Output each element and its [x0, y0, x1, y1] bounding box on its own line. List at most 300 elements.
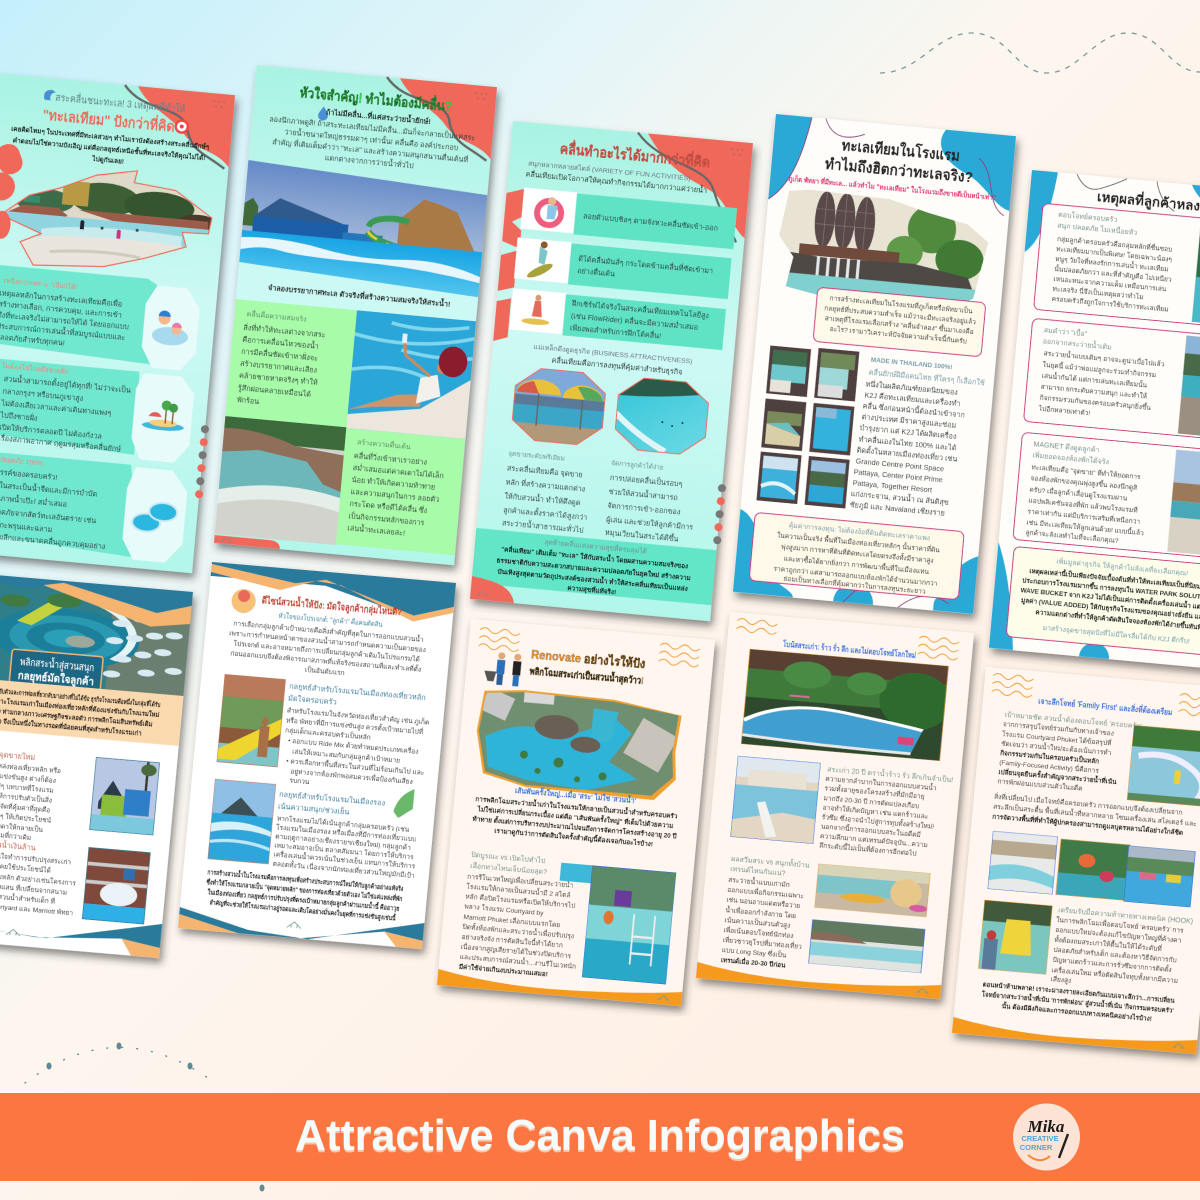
icon: menu dots [475, 92, 487, 100]
column text: easy management: ผู้เล่น และช่วยให้ลูกค้ามีการ [606, 515, 694, 532]
text: secondary city hotels [272, 790, 422, 880]
closing text: ในเมืองท่องเที่ยว กลยุทธ์การปรับปรุงที่ตรงเป้าหมายกลุ่มลูกค้าผ่านเกมน้ำนี้ คืออาวุธ [207, 886, 400, 914]
green panel: excitement: คลื่นที่วิ่งเข้าหาเราอย่าง [354, 451, 427, 467]
section 2 [0, 358, 196, 464]
title: คลื่นทำอะไรได้มากกว่าที่คิด [559, 139, 711, 170]
logo: CREATIVE [1021, 1134, 1059, 1143]
bottom panel: ธรรมชาติกับความสะดวกสบายและความปลอดภัยในยุคใหม่ สร้างความ [496, 555, 691, 582]
green panel: realism [225, 299, 357, 427]
box: magnet: เพิ่มยอดจองห้องพักได้จริง [1032, 450, 1109, 466]
green panel: excitement: เล่นน้ำทะเลเลยล่ะ! [347, 522, 405, 537]
text: adult pool vs family: เน้นความเป็นส่วนตัวสูง [724, 915, 791, 930]
text: adult pool vs family: เที่ยวชาวยุโรปที่มาท่องเที่ยว [722, 935, 803, 951]
bottom panel [471, 528, 716, 605]
logo mark [916, 988, 929, 994]
text: city hotels: กลุ่มเด็กและครอบครัวเป็นหลัก [285, 726, 371, 742]
photo: family slide [216, 674, 286, 768]
intro text: (Family-Focused Activity) นี่คือการ [999, 757, 1100, 775]
text: city hotels: • ควรเลือกหาพื้นที่สระในส่วนที่ไม่ร้อนเกินไป และ [286, 756, 425, 777]
subheading business: คลื่นเทียมคือการลงทุนที่คุ้มค่าสำหรับธุรกิจ [551, 356, 683, 377]
text: 20-year pool problems: ความลึกมาก แต่เทรนด์ปัจจุบัน...ความ [820, 832, 928, 849]
text: 20-year pool problems: นอกจากนี้การออกแบบสระในอดีตมี [821, 821, 921, 839]
callout: intro: อะไร? เรามาวิเคราะห์ปัจจัยความสำเร็จนี้กันครับ [829, 324, 967, 345]
box: magnet: ครับ? เมื่อลูกค้าเลื่อนดูโรงแรมผ่าน [1029, 484, 1128, 502]
box: family: ครอบครัวถึงถูกใจการใช้บริการทะเลเทียม [1051, 295, 1169, 314]
bottom panel: สุดท้ายคลื่นแห่งความสุขที่ครบคุมได้ [544, 537, 647, 556]
photo: beach guests [1167, 450, 1200, 554]
callout: intro [813, 287, 986, 357]
icon: menu dots [213, 100, 225, 108]
section 2: ไม่ต้องเสียเวลาและค่าเดินทางแพงๆ [0, 398, 112, 417]
intro text: ชัดเจนว่า สวนน้ำใหม่จะต้องเน้นการทำ [1001, 738, 1112, 757]
decor zigzag left [992, 673, 1033, 698]
panel: page 7 water park design [178, 562, 456, 949]
closing text [204, 866, 404, 924]
column text: easy management: จัดการการเข้า-ออกของ [607, 501, 681, 517]
panel: page 6 turning pools into attractions [0, 571, 193, 958]
decor cyan blobs [731, 114, 1016, 634]
box: boredom: ในยุคนี้ แม้ว่าพ่อแม่ลูกจะร่วมทำกิจกรรม [1042, 360, 1157, 379]
box: family: ตอบโจทย์ครอบครัว [1058, 210, 1118, 224]
box: boredom: ออกจากสระว่ายน้ำเดิม [1042, 334, 1112, 352]
panel: page 3 what waves can do [470, 121, 757, 622]
column text: easy management: หมุนเวียนในสระได้ดีขึ้น [605, 527, 679, 544]
intro text: โปรเจกต์ และอาจหมายถึงการเปลี่ยนกลุ่มลูกค้าเดิมในโปรแกรมได้ [233, 639, 420, 663]
box: boredom: เล่นน้ำกันได้ แต่การเล่นทะเลเทียมนั้น [1041, 371, 1148, 389]
decor blobs [0, 139, 28, 241]
text: made in Thailand: Grande Centre Point Space [855, 456, 944, 473]
logo mark [1172, 1043, 1185, 1049]
row: float: ลอยตัวแบบชิลๆ ตามจังหวะคลื่นซัดเข้า-ออก [583, 211, 718, 233]
logo: CORNER [1020, 1143, 1053, 1152]
box: magnet: เช่น มีทะเลเทียมให้ลูกเล่นด้วย! แบบนี้แล้ว [1026, 517, 1144, 537]
row: surf: เพียงพอสำหรับการฝึกโต้คลื่น! [570, 323, 661, 340]
decor zigzag right [1178, 693, 1200, 718]
intro text: การเลือกกลุ่มลูกค้าเป้าหมายคือสิ่งสำคัญที่สุดในการออกแบบสวนน้ำ [233, 618, 424, 644]
body text: สิ่งที่เปลี่ยนไป เมื่อโจทย์คือครอบครัว การออกแบบจึงต้องเปลี่ยนจาก [994, 792, 1183, 817]
text: 20-year pool problems [819, 762, 954, 860]
box: family: นั้นปลอดภัยกว่า และที่สำคัญคือ ไม่เหนียว [1054, 264, 1172, 284]
photo: diving board pool [730, 756, 821, 844]
column text: easy management: จัดการลูกค้าได้ง่าย [611, 459, 664, 472]
subheading: ภูเก็ต พัทยา ที่มีทะเล... แล้วทำไม "ทะเลเทียม" ในโรงแรมถึงขายดีเป็นหน้าเท่า? [788, 173, 997, 203]
text: secondary city hotels: ตามฤดูกาลอย่างเชียงรายฯ/เชียงใหม่) กลุ่มลูกค้า [275, 833, 411, 852]
text: technical challenges: ทั้งต้องถมสระเก่าให้ตื้นในให้ได้ระดับที่ [1054, 935, 1162, 953]
decor dots [713, 484, 726, 545]
text: closed vs open: การรีโนเวทใหญ่เพื่อเปลี่ยนสระว่ายน้ำ [467, 872, 574, 890]
section 1 [0, 265, 202, 372]
text: made in Thailand: ติดตั้งในหลายเมืองท่องเที่ยว เช่น [856, 444, 958, 463]
text: technical challenges: เครื่องเล่นใหม่ หรือตัดสินใจทุบทั้งหากมีความ [1051, 965, 1178, 985]
box: family: กลุ่มลูกค้าครอบครัวคือกลุ่มหลักที่ชื่นชอบ [1057, 234, 1173, 254]
photo: aerial lagoon [476, 690, 682, 800]
text: city hotels: อยู่ห่างจากห้องพักพอสมควรเพื่อป้องกันเสียง [290, 766, 413, 786]
box: magnet: ทะเลเทียมคือ "จุดขาย" ที่ทำให้ยอดการ [1031, 462, 1141, 482]
text: closed vs open: และประสบการณ์สวนน้ำ...งานรีโนเวทนัก [459, 952, 576, 971]
section 2: เปิดให้บริการตลอดปี ไม่ต้องกังวล [0, 422, 102, 441]
column text: premium destination: สระคลื่นเทียมคือ จุดขาย [507, 463, 583, 479]
bottom orange wave [952, 1017, 1197, 1054]
photo row [987, 831, 1196, 907]
title [41, 89, 190, 137]
box: magnet: แอปพลิเคชันจองที่พัก แล้วพบโรงแรมที่ [1028, 495, 1138, 514]
box: boredom: สามารถ ยกระดับความสนุก และทำให้ [1040, 383, 1147, 400]
green panel: excitement: และความสนุกในการ ลอยตัว [350, 487, 440, 504]
text: adult pool vs family: ออกแบบเพื่อกิจกรรมเฉพาะ [727, 885, 804, 901]
photo: secondary city pool [208, 778, 276, 864]
text: closed vs open: Marriott Phuket เลือกแบบแรกโดย [463, 913, 561, 929]
section 1: เหนือกว่าเพราะ "เลือกได้" [3, 277, 79, 291]
section 2: กลางกรุงฯ หรือบนภูเขาสูง [2, 386, 84, 403]
logo [1013, 1104, 1080, 1170]
callout: intro: การสร้างทะเลเทียมในโรงแรมที่ภูเก็ตหรือพัทยาเป็น [829, 293, 973, 316]
intro text: เปลี่ยนจุดยืนครั้งสำคัญจากสระว่ายน้ำที่เน้น [998, 766, 1118, 786]
closing text [980, 978, 1176, 1025]
text: adult pool vs family: สระว่ายน้ำแบบเก่ามัก [728, 875, 790, 889]
photo: rocks and sand [214, 416, 346, 546]
text: secondary city hotels: โรงแรมในเมืองรอง หรือเมืองที่มีการท่องเที่ยวแบบ [276, 823, 417, 844]
text: technical challenges: ออกแบบใหม่จะต้องแก้ไขปัญหาใหญ่ที่ค้างคา [1055, 925, 1182, 945]
box: boredom: ไปอีกหลายเท่าตัว! [1037, 405, 1091, 417]
closing text: ตอนหน้าห้ามพลาด! เราจะมาลงรายละเอียดกันแบบเจาะลึกว่า...การเปลี่ยน [982, 978, 1176, 1005]
decorative dotted arc bottom left [25, 1042, 264, 1192]
callout: worth investing: คุ้มค่าการลงทุน: ไม่ต้องง้อที่ดินติดทะเลราคาแพง [788, 521, 930, 543]
text: city hotels: กลยุทธ์สำหรับโรงแรมในเมืองท่องเที่ยวหลัก [289, 681, 426, 702]
photo: waterfall ship [779, 190, 988, 301]
text: city hotels: มัดใจครอบครัว [288, 694, 337, 707]
title [824, 134, 976, 187]
decor zigzag left [736, 618, 777, 635]
text: city hotels: หรือ พัทยาที่มีการแข่งขันสูง ควรตั้งเป้าหมายไปที่ [286, 716, 424, 736]
intro text: จากการสรุปโจทย์ร่วมกันกับทางเจ้าของ [1002, 720, 1114, 738]
text: city hotels: เล่นให้เหมาะสมกับกลุ่มลูกค้าเป้าหมาย [292, 747, 401, 765]
banner [0, 1093, 1200, 1181]
photo: water slides [89, 756, 160, 836]
text: adult pool vs family: แบบ Long Stay ซึ่งเป็น [721, 945, 787, 960]
banner title: Attractive Canva Infographics [295, 1111, 905, 1160]
intro text [997, 708, 1142, 797]
text: city hotels: รบกวน [289, 777, 310, 786]
photo: water play [582, 865, 676, 984]
text: made in Thailand: หนึ่งในผลิตภัณฑ์ยอดนิยมของ [865, 379, 958, 397]
text: technical challenges: เสี่ยงสูง [1050, 974, 1072, 985]
text: adult pool vs family: น้ำเพื่อออกกำลังกาย โดย [725, 905, 797, 920]
title plaque: กลยุทธ์มัดใจลูกค้า [17, 668, 95, 689]
panel: page 2 why waves matter [214, 65, 497, 565]
title: ดีไซน์สวนน้ำให้ปัง: มัดใจลูกค้ากลุ่มไหนดี? [261, 593, 403, 620]
panel: page 4 hotel wave pool [731, 114, 1016, 634]
text: made in Thailand: K2J คือทะเลเทียมและเครื่องทำ [864, 390, 961, 408]
green panel: excitement [336, 428, 465, 555]
icon: island [130, 373, 195, 464]
text: made in Thailand: คลื่นยักษ์ฝีมือคนไทย ที่ใครๆ ก็เลือกใช้ [868, 367, 985, 387]
intro text: เรามาดูกันว่าการตัดสินใจครั้งสำคัญนี้ต้องเจอกับอะไรบ้าง! [494, 825, 654, 849]
green panel: excitement: เป็นกิจกรรมหลักของการ [348, 510, 425, 527]
box: boredom: สมคำว่า "เบื่อ" [1043, 325, 1088, 338]
icon: pool [121, 467, 189, 564]
body text: สระลึกเป็นสระตื้น พื้นที่เล่นน้ำที่หลากหลาย โซนเครื่องเล่น สไลเดอร์ และ [993, 802, 1197, 828]
text: technical challenges: ในการพลิกโฉมเพื่อตอบโจทย์ 'ครอบครัว' การ [1056, 915, 1184, 935]
intro text [266, 101, 477, 176]
bottom orange wave [696, 962, 941, 999]
callout: worth investing: และหาซื้อได้ยากยิ่งกว่า การพัฒนาพื้นที่ในเมืองแทน [783, 553, 930, 576]
column text: easy management [605, 459, 699, 545]
intro text: ลองนึกภาพดูสิ! ถ้าสระทะเลเทียมไม่มีคลื่น...มันก็จะกลายเป็นแค่สระ [269, 114, 476, 143]
text: 20-year pool problems: อาจทำให้เกิดปัญหา เช่น แตกร้าวและ [822, 803, 929, 821]
panel: page 10 family first [952, 667, 1200, 1054]
icon: green slide [393, 787, 415, 819]
title: โบนัสสระเก่า: ร้าว รั่ว ลึก และไม่ตอบโจทย์โลกใหม่ [782, 638, 917, 660]
subtitle: พลิกโฉมสระเก่าเป็นสวนน้ำสุดว้าว! [528, 664, 644, 687]
section 1: เหตุผลหลักในการสร้างทะเลเทียมคือเพื่อ [0, 288, 123, 309]
green panel: realism: การมีคลื่นซัดเข้าหาฝั่งจะ [241, 347, 318, 363]
bottom panel: บันเทิงสูงสุดตามวัตถุประสงค์ของสวนน้ำ ทำให้สระคลื่นเทียมเป็นแหล่ง [497, 565, 688, 594]
intro text: แตกต่างจากการว่ายน้ำทั่วไป [324, 152, 415, 170]
logo mark [220, 537, 233, 543]
title plaque [9, 649, 103, 693]
column text: premium destination [502, 449, 593, 535]
decor zigzag right [917, 636, 959, 660]
text: adult pool vs family [720, 852, 810, 971]
icon: pool swatch [560, 863, 595, 884]
decorative dashed wave top right [880, 33, 1200, 73]
photo: woman by pool [346, 310, 476, 440]
intro text: การพักผ่อนแบบส่วนตัวในอดีต [997, 777, 1083, 793]
photo: aerial water park [0, 582, 192, 696]
decor outlines [733, 114, 1011, 614]
closing text: สำคัญที่จะช่วยให้โรงแรมเก่าอยู่รอดและเติบโตอย่างมั่นคงในยุคที่การแข่งขันสูงเช่นนี้ [209, 897, 397, 924]
box: boredom: สระว่ายน้ำแบบเดิมๆ อาจจะดูน่าเบื่อไปแล้ว [1043, 349, 1165, 369]
section 2: ไปถึงชายฝั่ง [0, 410, 38, 423]
body text [992, 792, 1198, 839]
intro text: เป็นอันดับแรก [305, 665, 345, 677]
panel: page 5 why customers love [988, 170, 1200, 685]
intro text [226, 618, 427, 684]
row: jump [514, 237, 732, 299]
text: made in Thailand: ทำคลื่นเองในไทย 100% และได้ [858, 434, 957, 452]
corner blob [394, 78, 497, 159]
logo: Mika [1027, 1117, 1065, 1136]
section 1: สร้างทางเลือก, การควบคุม, และการเข้า [0, 299, 122, 320]
text: secondary city hotels: เน้นความสนุก/ช่วงเย็น [278, 801, 350, 817]
text: closed vs open: เลือกทางไหนเจ็บน้อยสุด? [470, 861, 547, 876]
subheading business [532, 342, 693, 377]
intro text: เป้าหมายชัด สวนน้ำต้องตอบโจทย์ 'ครอบครัว' [1004, 708, 1142, 731]
logo mark [657, 995, 670, 1001]
top chevrons [0, 571, 193, 622]
photo grid [756, 343, 859, 509]
closing text: การสร้างสวนน้ำในโรงแรมคือการลงทุนเพื่อสร้างประสบการณ์ใหม่ให้กับลูกค้าอย่างแท้จริง [207, 866, 404, 894]
text: closed vs open: ปิดทั้งห้องพักและสระว่ายน้ำเพื่อปรับปรุง [462, 922, 575, 940]
intro text: สำคัญ ที่เติมเต็มคำว่า "ทะเล" และสร้างความสนุกสนานตื่นเต้นที่ [272, 136, 469, 164]
text: adult pool vs family: เพื่อเน้นตอบโจทย์นักท่อง [723, 925, 794, 940]
callout: worth investing [749, 512, 964, 600]
row: surf: ฝึกเซิร์ฟได้จริงในสระคลื่นเทียมเทคโนโลยีสูง [571, 299, 709, 321]
panel: page 9 old pool problems [696, 612, 974, 999]
text: city hotels: สำหรับโรงแรมในจังหวัดท่องเที่ยวสำคัญ เช่น ภูเก็ต [287, 706, 430, 727]
column text: premium destination: จุดขายระดับพรีเมียม [508, 449, 565, 463]
text: closed vs open: มีค่าใช้จ่ายเกินงบประมาณเสมอ! [458, 962, 548, 978]
decor dots [195, 425, 209, 499]
green panel: excitement: กระโดด หรือดีได้คลื่น ซึ่ง [349, 499, 428, 515]
box: family [1034, 203, 1200, 330]
caption: จำลองบรรยากาศทะเล ตัวจริงที่สร้างความสมจริงให้สระน้ำ! [268, 281, 451, 309]
text: made in Thailand: Pattaya, Together Resort [852, 478, 933, 494]
green panel: realism: สร้างบรรยากาศและเสียง [240, 359, 317, 375]
text: closed vs open: โรงแรมให้กลายเป็นสวนน้ำมี 2 สไตล์ [466, 882, 571, 900]
banner title: Attractive Canva Infographics [295, 1113, 905, 1162]
text: adult pool vs family: เช่น นอนอาบแดดหรือว่าย [726, 896, 801, 910]
intro text [9, 123, 210, 174]
photo: kids pool [1178, 336, 1200, 436]
text: technical challenges [1050, 906, 1193, 995]
intro band [0, 675, 183, 746]
text: adult pool vs family: เทรนด์ไหนกันแน่? [730, 864, 786, 878]
text: 20-year pool problems: ลึกระดับนี้ไม่เป็นที่ต้องการอีกต่อไป [819, 840, 917, 858]
subheading: คลื่นเทียมเปิดโอกาสให้คุณทำกิจกรรมได้มากกว่าแค่ว่ายน้ำ [525, 169, 708, 195]
corner blob [639, 133, 753, 238]
panel: page 1 wave pool reasons [0, 73, 239, 574]
title: "ทะเลเทียม" ปังกว่าที่คิด [42, 104, 176, 136]
corner blob [132, 86, 235, 167]
text: closed vs open: พลาง โรงแรม Courtyard by [464, 903, 544, 918]
text: adult pool vs family: ผลสวีมสระ vs สนุกทั้งบ้าน [731, 852, 810, 870]
title plaque: พลิกสระน้ำสู่สวนสนุก [20, 654, 95, 674]
photo: wave pool cut-out [4, 170, 213, 268]
text: closed vs open [458, 850, 586, 981]
title: ทำไมถึงฮิตกว่าทะเลจริง? [824, 154, 974, 187]
intro text: เพราะการกำหนดหน้าตาของสวนน้ำสามารถกำหนดความเป็นตายของ [229, 628, 426, 654]
box: magnet: ลูกค้าจะลังเลทำไมที่จะเลือกคุณ? [1025, 527, 1119, 545]
callout: intro: สาเหตุที่โรงแรมเลือกสร้าง "คลื่นจำลอง" ขึ้นมาเองคือ [824, 313, 974, 336]
corner blob [470, 576, 516, 603]
title: เจาะลึกโจทย์ 'Family First' และสิ่งที่ต้องเตรียม [1038, 695, 1173, 717]
callout: worth investing: ย่อมเป็นทางเลือกที่คุ้มค่ากว่าในการลงทุนระยะยาว [783, 574, 926, 596]
body text: การจัดวางพื้นที่ที่ทำให้ผู้ปกครองสามารถดูแลบุตรหลานได้อย่างใกล้ชิด [992, 811, 1184, 838]
bottom orange wave [437, 969, 682, 1006]
green panel: realism: สิ่งที่ทำให้ทะเลต่างจากสระ [243, 323, 326, 340]
column text: premium destination: ให้กับสวนน้ำ ทำให้ดึงดูด [504, 490, 581, 507]
decor zigzag right [658, 643, 700, 667]
text: made in Thailand: บำรุงยาก แต่ K2J ได้ผลิตเครื่อง [859, 423, 957, 441]
text: city hotels [280, 681, 432, 796]
photo: sunbathing [814, 864, 931, 918]
caption: เส้นพันครั้งใหญ่...เมื่อ 'สระ' ไม่ใช่ 'สวนน้ำ' [515, 784, 637, 806]
text: adult pool vs family: เทรนด์เมื่อ 20-30 ปีก่อน [720, 954, 787, 970]
callout: worth investing: ราคาถูกกว่า แต่สามารถออกแบบห้องพักได้จำนวนมากกว่า [773, 565, 938, 588]
text: technical challenges: ปัญหาแตกร้าวและการรั่วซึมจากการติดตั้ง [1052, 955, 1172, 974]
text: 20-year pool problems: รั่วซึม ซึ่งอาจนำไปสู่การทุบทั้งสร้างใหม่! [821, 812, 935, 831]
row: surf [509, 288, 726, 350]
decor outlines [1074, 174, 1177, 211]
section 2: สวนน้ำสามารถตั้งอยู่ได้ทุกที่! ไม่ว่าจะเป็น [3, 373, 131, 395]
intro text: ว่ายน้ำขนาดใหญ่ธรรมดาๆ เท่านั้น! คลื่นคือ องค์ประกอบ [284, 126, 459, 152]
text: city hotels: • ออกแบบ Ride Mix ด้วยทำหมดประเภทเครื่อง [288, 736, 419, 756]
green panel: realism: คือการเคลื่อนไหวของน้ำ [242, 334, 319, 351]
intro text: ไปดูกันเลย! [91, 154, 124, 167]
photo: wave pool [808, 919, 926, 974]
text: 20-year pool problems: ความยากลำบากในการออกแบบสวนน้ำ [825, 774, 937, 793]
intro text: ถ้าไม่มีคลื่น...ที่แค่สระว่ายน้ำยักษ์! [326, 106, 431, 126]
text: made in Thailand: Pattaya, Center Point Prime [853, 467, 943, 484]
column text: premium destination: ลูกค้าและตั้งราคาได้สูงกว่า [503, 504, 588, 522]
photo: umbrellas [512, 368, 606, 446]
subheading: สนุกหลากหลายสไตล์ (VARIETY OF FUN ACTIVITIES) [528, 160, 691, 183]
icon: workers [483, 651, 522, 687]
text: made in Thailand: ชัยภูมิ และ Navaland เชียงราย [849, 500, 945, 518]
icon: float [231, 588, 257, 614]
row: float [520, 188, 737, 249]
section 1: ถึงที่ทะเลจริงไม่สามารถให้ได้ โดยออกแบบ [0, 310, 130, 331]
column text: premium destination: หลัก ที่สร้างความแตกต่าง [505, 477, 586, 494]
decor coral chevrons [493, 187, 525, 343]
box: magnet [1013, 432, 1200, 560]
title: ทะเลเทียมในโรงแรม [841, 135, 961, 165]
box: family: ทะเลเทียมมากเป็นพิเศษ! โดยเฉพาะน้องๆ [1056, 244, 1173, 264]
box: magnet: ราคาเท่ากัน แต่มีบริการเสริมที่เหนือกว่า [1027, 506, 1141, 526]
intro text: กิจกรรมร่วมกันในครอบครัวเป็นหลัก [1000, 748, 1100, 765]
green panel: excitement: น้อย ทำให้เกิดความท้าทาย [351, 475, 436, 492]
box: magnet: จองห้องพักของคุณพุ่งสูงขึ้น ลองนึกดูสิ [1030, 473, 1138, 492]
text: secondary city hotels: กลยุทธ์สำหรับโรงแรมในเมืองรอง [279, 790, 386, 808]
decor cyan blobs [988, 170, 1200, 685]
section 3 [0, 451, 189, 564]
green panel: realism: คลื่นคือความสมจริง [246, 309, 307, 324]
text: closed vs open: ปิดบูรณะ vs เปิดไปทำไป [471, 850, 546, 865]
callout: business value: เพิ่มมูลค่าธุรกิจ ให้ลูกค้าไม่ลังเลที่จะเลือกคุณ! [1056, 557, 1189, 578]
intro text: โรงแรม Courtyard Phuket ได้ข้อสรุปที่ [1002, 729, 1112, 747]
text: 20-year pool problems: มากถึง 20-30 ปี การดัดแปลงเกือบ [823, 794, 919, 810]
column text: premium destination: สระว่ายน้ำสาธารณะทั่วไป [502, 517, 584, 535]
text: new selling point [0, 743, 63, 844]
green panel: excitement: สร้างความตื่นเต้น [357, 437, 411, 451]
bottom chevrons [0, 903, 162, 950]
callout: worth investing: ในความเป็นจริง พื้นที่ในเมืองท่องเที่ยวหลักๆ นั้นราคาที่ดิน [777, 531, 941, 555]
text: pool worth millions [0, 833, 80, 917]
callout: business value [1006, 546, 1200, 657]
photo: splash [82, 847, 151, 924]
text: closed vs open: หลัก คือปิดโรงแรมหรือเปิดให้บริการไป [465, 893, 576, 910]
column text: easy management: การปล่อยคลื่นเป็นรอบๆ [610, 472, 683, 489]
box: family: เหนอะหนะจากความเค็ม เหมือนการเล่น [1053, 274, 1167, 293]
icon: menu dots [731, 148, 743, 156]
intro text: เคยคิดไหมๆ ในประเทศที่มีทะเลสวยๆ ทำไมเราบังต้องสร้างสระคลื่นยักษ์ๆ [11, 123, 210, 151]
photo: wave pool [614, 378, 709, 455]
section 2: ไม่ต้องไปไกลถึงชายฝั่ง [1, 361, 69, 376]
box: boredom: กิจกรรมร่วมกันของครอบครัวสนุกยิ่งขึ้น [1039, 393, 1152, 412]
box: family: หนูๆ วัยใจที่หลงรักการเล่นน้ำ ทะเลเทียม [1055, 254, 1169, 273]
panel: page 8 renovate [437, 619, 715, 1006]
title: หัวใจสำคัญ! ทำไมต้องมีคลื่น? [299, 82, 453, 115]
intro text: ท้าทาย ตั้งแต่การบริหารงบประมาณไปจนถึงการจัดการโครงสร้างอายุ 20 ปี [472, 813, 677, 840]
text: closed vs open: เนื่องจากสูญเสียรายได้ในช่วงปิดบริการ [460, 942, 572, 960]
photo: flowrider slide [238, 155, 489, 302]
row: surf: (เช่น FlowRider) คลื่นจะมีความสม่ำเสมอ [571, 311, 699, 332]
logo mark [476, 591, 489, 597]
corner blob [214, 535, 281, 549]
row: jump: อย่างตื่นเต้น [577, 266, 615, 279]
closing text: โจทย์จากสระว่ายน้ำที่เน้น 'การพักผ่อน' สู่สวนน้ำที่เน้น 'กิจกรรมครอบครัว' [980, 988, 1175, 1016]
box: boredom [1024, 318, 1200, 442]
text: secondary city hotels: เหมาะสมอาจเป็น ตลาดสัมมนา โดยการให้บริการ [274, 841, 414, 862]
green panel: realism: รู้สึกผ่อนคลายเหมือนได้ [238, 383, 312, 399]
intro text: การพลิกโฉมสระว่ายน้ำเก่าในโรงแรมให้กลายเป็นสวนน้ำสำหรับครอบครัว [475, 793, 678, 820]
text: 20-year pool problems: รวมทั้งอายุของโครงสร้างที่มักมีอายุ [824, 783, 925, 801]
text: secondary city hotels: ตลอดทั้งวัน เนื่องจากนักท่องเที่ยวส่วนใหญ่มักมีเป้า [272, 859, 415, 880]
text: technical challenges: ปลอดภัยสำหรับเด็ก และต้องหาวิธีจัดการกับ [1053, 945, 1177, 965]
title: Renovate อย่างไรให้ปัง [531, 646, 646, 671]
text: 20-year pool problems: สระเก่า 20 ปี ตราน้ำร้าว รั่ว ลึกเกินจำเป็น! [827, 763, 954, 784]
